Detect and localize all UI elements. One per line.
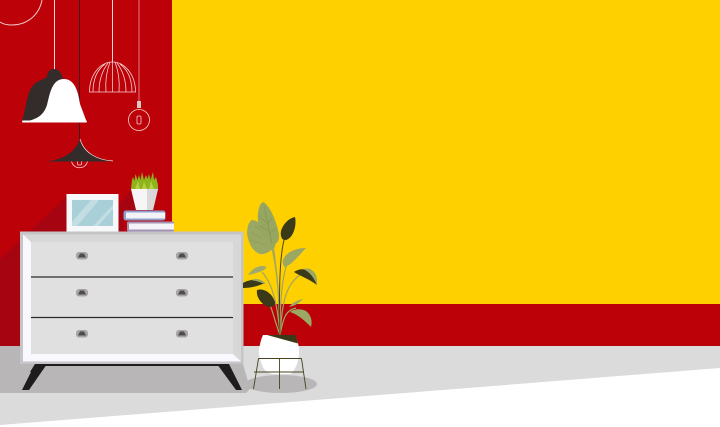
filament bulb right	[128, 101, 150, 130]
potted grass	[131, 172, 158, 210]
white floor foreground	[0, 368, 720, 427]
flat cone lamp	[46, 139, 113, 162]
floor	[0, 346, 720, 427]
bell lamp	[22, 69, 87, 122]
dresser	[20, 232, 244, 390]
pendant lamps	[0, 0, 150, 168]
lamp cords	[54, 0, 139, 140]
white pot	[259, 335, 299, 374]
small left leaf	[248, 266, 266, 275]
plant pot floor shadow	[245, 375, 317, 393]
dresser wall shadow	[0, 190, 243, 346]
dark lower leaf	[257, 290, 275, 307]
filament bulb under lamp	[72, 160, 88, 168]
wall lamp circle	[0, 0, 42, 25]
stems	[262, 240, 300, 335]
dark upper leaf	[281, 217, 296, 240]
drawer handles	[76, 252, 188, 338]
pot soil	[267, 335, 298, 344]
lower right leaves	[289, 299, 303, 307]
wire dome lamp	[89, 62, 136, 92]
dresser body	[20, 232, 244, 364]
dark right leaf	[294, 269, 317, 285]
dresser floor shadow	[0, 346, 250, 393]
drawer lines	[31, 277, 233, 318]
picture frame	[66, 194, 118, 232]
mid leaf	[283, 248, 306, 267]
pot stand	[254, 358, 306, 389]
large top leaf	[258, 202, 279, 246]
potted plant	[243, 202, 317, 389]
large left leaf	[247, 220, 275, 254]
dresser legs	[22, 364, 242, 390]
yellow wall panel	[172, 0, 720, 304]
books	[124, 210, 174, 232]
